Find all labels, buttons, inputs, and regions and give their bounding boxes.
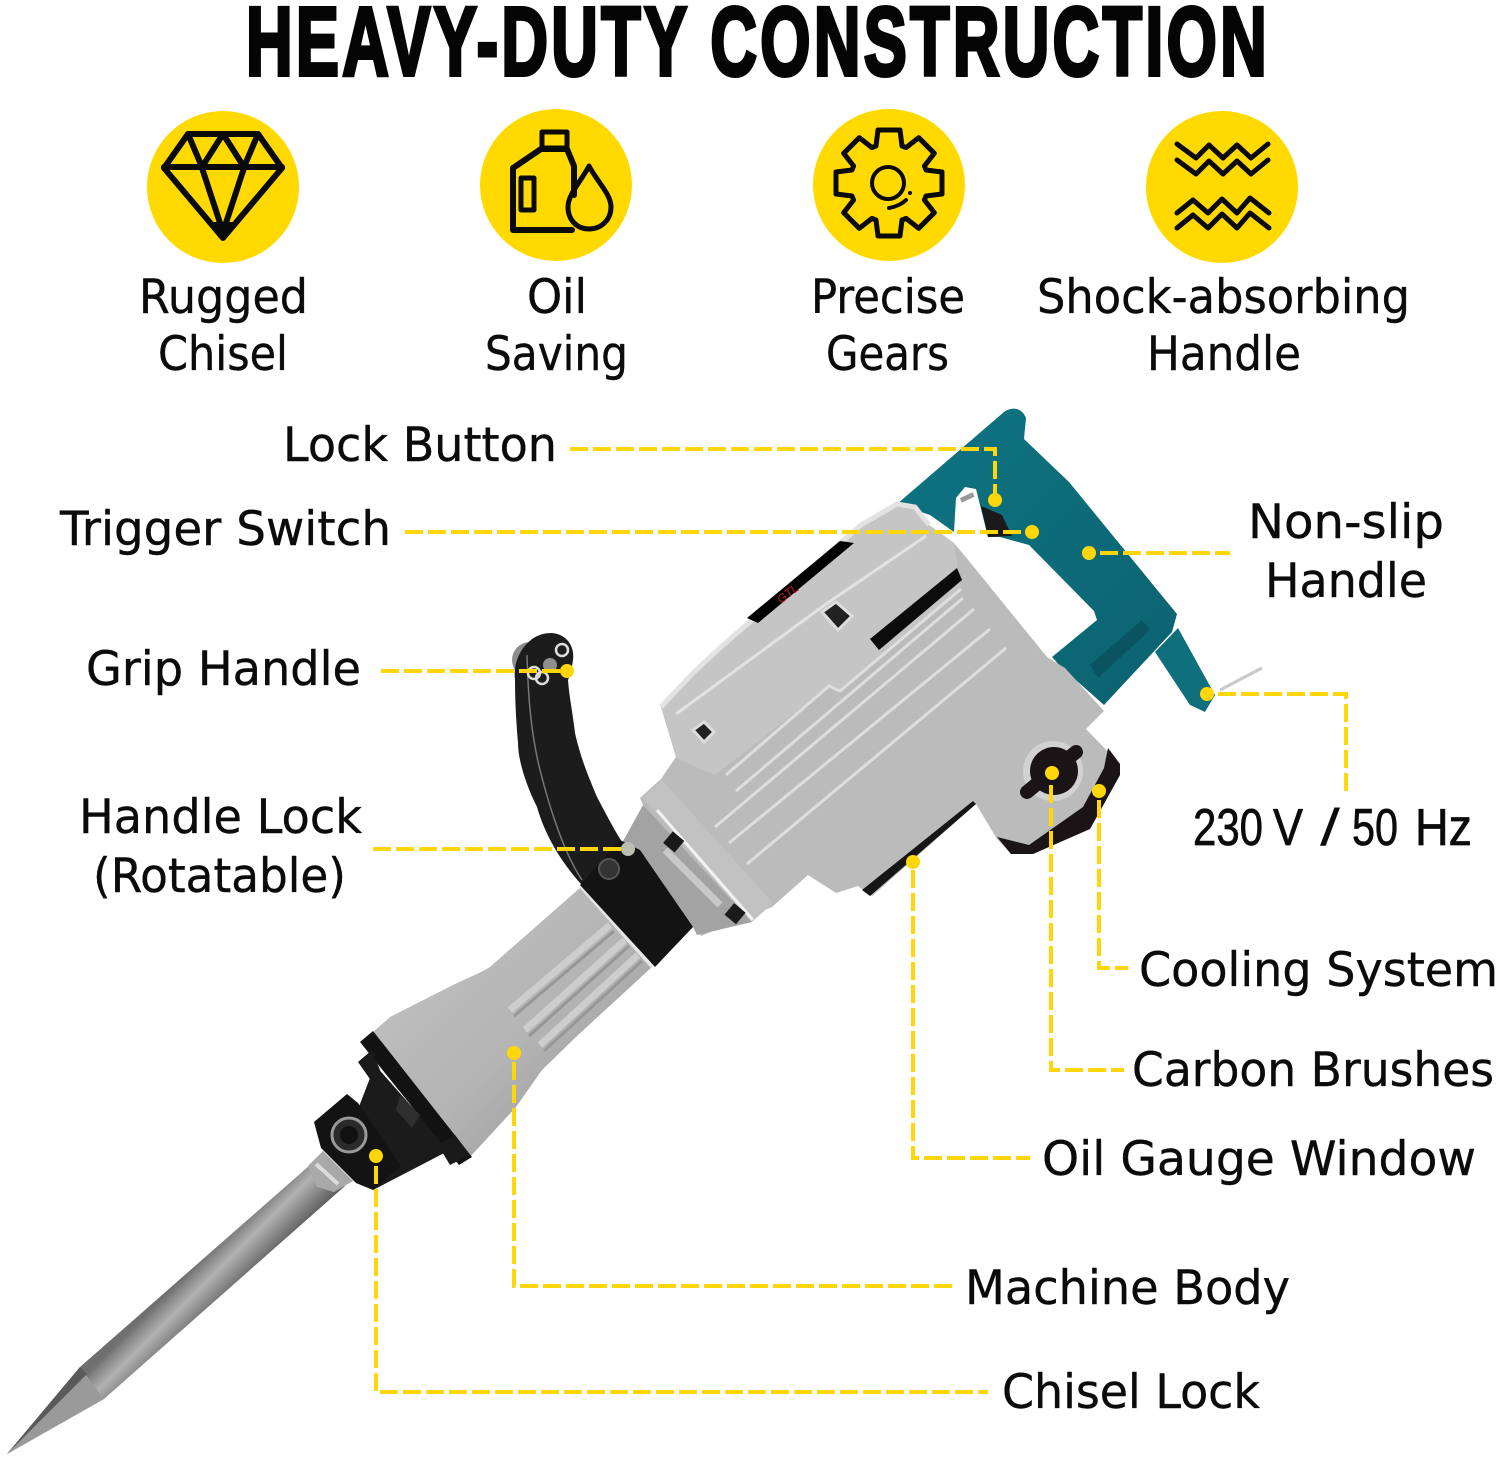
icon: gear — [813, 109, 965, 261]
label: Precise Gears: Precise — [811, 270, 965, 325]
label: Precise Gears: Gears — [826, 327, 949, 382]
brand mark: GTL — [774, 581, 801, 606]
chisel lock block — [314, 1094, 401, 1190]
callout: Non-slip Handle: Handle — [1265, 554, 1427, 609]
grey motor housing — [640, 504, 1120, 936]
feature: rugged chisel — [139, 111, 308, 382]
callout: Handle Lock: (Rotatable) — [93, 849, 346, 904]
callout: Lock Button — [283, 418, 1002, 507]
callout: voltage — [1193, 687, 1472, 857]
callout: Non-slip Handle: Non-slip — [1248, 495, 1444, 550]
callout: Oil Gauge Window: Oil Gauge Window — [1042, 1132, 1476, 1187]
screw pads — [822, 602, 852, 630]
callout: Grip Handle — [86, 642, 574, 697]
label: Oil Saving — [485, 270, 628, 382]
callout: Carbon Brushes: Carbon Brushes — [1132, 1043, 1494, 1098]
vent slot — [870, 568, 962, 650]
feature: precise gears — [811, 109, 965, 382]
label: Rugged Chisel — [139, 270, 308, 382]
label: Oil Saving: Saving — [485, 327, 628, 382]
teal rear handle — [897, 409, 1262, 712]
label: Oil Saving: Oil — [527, 270, 587, 325]
black brand strip — [747, 541, 854, 623]
label: Shock-absorbing Handle: Handle — [1147, 327, 1301, 382]
callout: voltage: Hz — [1415, 799, 1472, 857]
callout: Trigger Switch — [59, 502, 1039, 557]
black clamp ring — [580, 840, 693, 967]
label: Precise Gears — [811, 270, 965, 382]
grip handle — [512, 633, 640, 905]
black flange and neck — [350, 1031, 472, 1190]
callout: Lock Button: Lock Button — [283, 418, 557, 473]
callout: voltage: / — [1320, 799, 1341, 857]
callout: Chisel Lock — [369, 1149, 1261, 1420]
label: Rugged Chisel: Chisel — [158, 327, 288, 382]
carbon brush cap — [1023, 741, 1083, 801]
feature: shock-absorbing handle — [1037, 111, 1410, 382]
tool barrel — [373, 887, 652, 1157]
callout: Cooling System — [1092, 784, 1498, 998]
upper cover — [661, 504, 961, 775]
callout: Oil Gauge Window — [906, 855, 1476, 1187]
chisel shaft — [7, 1151, 353, 1454]
callout: Handle Lock: Handle Lock — [79, 790, 363, 845]
rear end cap — [997, 748, 1120, 854]
callout: Non-slip Handle — [1082, 495, 1444, 609]
label: Shock-absorbing Handle — [1037, 270, 1410, 382]
label: Rugged Chisel: Rugged — [139, 270, 308, 325]
label: Shock-absorbing Handle: Shock-absorbing — [1037, 270, 1410, 325]
callout: Handle Lock — [79, 790, 635, 904]
housing ribs — [715, 589, 1006, 864]
callout: Carbon Brushes — [1045, 766, 1494, 1098]
front collar — [622, 780, 773, 935]
callout: Chisel Lock: Chisel Lock — [1002, 1365, 1261, 1420]
pale rim — [661, 504, 929, 707]
callout: Machine Body: Machine Body — [965, 1261, 1290, 1316]
icon: diamond — [147, 111, 299, 263]
icon: waves — [1146, 111, 1298, 263]
icon: oil bottle and drop — [480, 109, 632, 261]
feature: oil saving — [480, 109, 632, 382]
callout: voltage: 230 — [1193, 799, 1263, 857]
oil gauge strip — [862, 801, 976, 896]
callout: voltage: 50 — [1352, 799, 1398, 857]
callout: Machine Body — [507, 1046, 1290, 1316]
callout: Cooling System: Cooling System — [1139, 943, 1498, 998]
callout: voltage: V — [1273, 799, 1303, 857]
demolition hammer product drawing — [7, 409, 1262, 1454]
callout: Trigger Switch: Trigger Switch — [59, 502, 391, 557]
callout: Grip Handle: Grip Handle — [86, 642, 361, 697]
